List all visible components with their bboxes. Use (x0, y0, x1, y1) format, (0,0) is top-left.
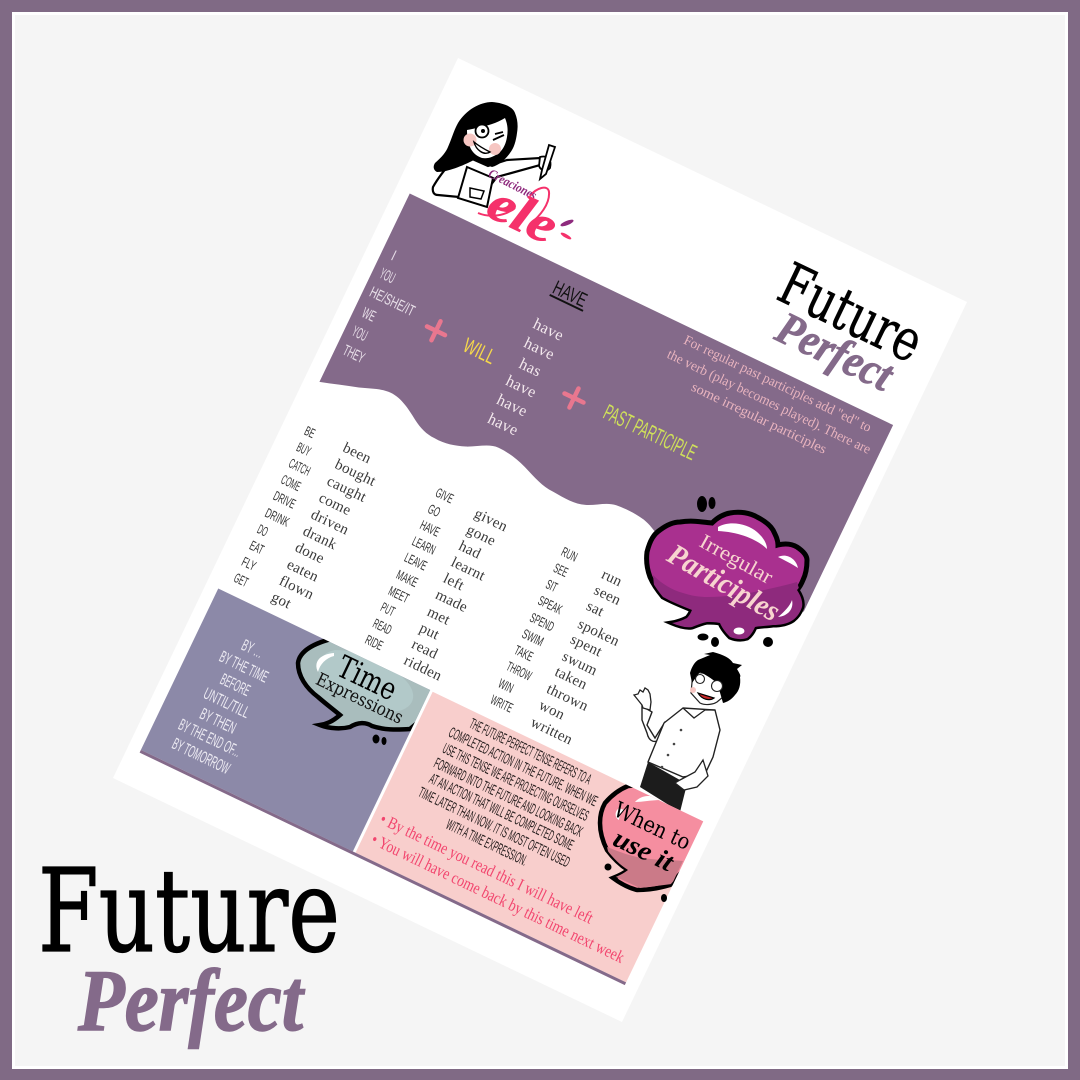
girl hand and pen (539, 145, 555, 179)
man raised arm (642, 706, 680, 741)
verb table: column two participles (401, 506, 515, 685)
man eyes and mouth (690, 674, 722, 700)
rotated text content: COMPLETED ACTION IN THE FUTURE. WHEN WE (446, 724, 600, 810)
bubble sheen (318, 650, 413, 712)
verb table: column two participles: met (425, 604, 453, 629)
text block: pronouns: YOU (349, 323, 370, 345)
text block: pronouns (339, 246, 436, 378)
verb table: column one base: BE (302, 423, 318, 441)
man face (691, 672, 723, 705)
verb table: column three participles: taken (552, 664, 590, 693)
panel: grammar formula purple wave (319, 193, 893, 615)
verb table: column two participles: left (440, 571, 467, 595)
text block: time expressions list: BY THE TIME (216, 648, 271, 687)
verb table: column three base: WRITE (488, 692, 515, 716)
verb table: column one base: DRIVE (271, 488, 298, 512)
title: Future Perfect corner (38, 845, 340, 1050)
girl hair (434, 102, 518, 172)
bubble highlights (616, 796, 660, 820)
label: past participle: PAST PARTICIPLE (600, 399, 701, 465)
text block: have conjugations: have (494, 391, 530, 421)
man hand (634, 688, 651, 710)
verb table: column one participles: bought (332, 457, 379, 490)
bubble shade (607, 847, 683, 888)
icon: time expressions speech bubble (296, 638, 430, 732)
text block: have conjugations: have (485, 410, 521, 439)
icon: when to use it speech bubble (598, 784, 704, 892)
girl eyes and smile (474, 124, 504, 153)
man shirt (648, 708, 720, 777)
verb table: column two base (363, 485, 461, 656)
cloud drops (697, 496, 773, 647)
verb table: column one participles: drank (300, 523, 339, 553)
heading: irregular participles (661, 529, 786, 628)
word Participles: Participles (661, 537, 786, 628)
verb table: column two base: MEET (386, 583, 412, 606)
text block: have conjugations (485, 316, 566, 439)
word Perfect: Perfect (768, 301, 902, 401)
verb table: column three participles (528, 567, 646, 748)
cloud shade (653, 575, 802, 640)
rotated text content: USE THIS TENSE WE ARE PROJECTING OURSELVES (440, 740, 591, 825)
verb table: column one base: CATCH (286, 456, 313, 479)
icon: irregular participles cloud bubble (647, 496, 815, 650)
word Perfect: Perfect (77, 953, 305, 1050)
girl notebook (458, 167, 493, 207)
bubble body (296, 638, 430, 732)
panel: time expressions (141, 588, 430, 851)
text block: regular participle note: some irregular participles (689, 380, 829, 458)
bubble highlight (316, 653, 334, 672)
word Irregular: Irregular (696, 529, 777, 589)
text block: have conjugations: has (516, 356, 544, 381)
verb table: column two base: MAKE (394, 567, 420, 590)
verb table: column three participles: spoken (575, 616, 622, 650)
text block: when to use explanation: AT AN ACTION THAT WILL BE COMPLETED SOME (426, 770, 576, 854)
verb table: column one base: DO (255, 522, 270, 539)
heading: when to use it: use it (609, 823, 680, 878)
verb table: column two participles: given (472, 506, 510, 535)
verb table: column one participles: driven (308, 507, 351, 539)
girl face (467, 118, 508, 158)
verb table: column two participles: learnt (448, 555, 488, 585)
verb table: column two participles: made (433, 587, 470, 616)
verb table: column two base: GIVE (433, 485, 456, 506)
logo swoosh (478, 188, 549, 224)
verb table: column three base: WIN (496, 676, 516, 696)
text block: when to use explanation (408, 708, 609, 886)
text block: pronouns: HE/SHE/IT (367, 284, 418, 320)
verb table: column two base: GO (425, 501, 443, 520)
heading: when to use it: When to (609, 798, 694, 856)
girl hand on notebook (470, 188, 484, 199)
text block: when to use explanation: WITH A TIME EXPRESSION. (443, 816, 530, 870)
panel: when to use it (356, 692, 703, 982)
girl blush (464, 134, 501, 155)
cloud body (647, 512, 807, 639)
verb table: column three base: SEE (551, 560, 570, 580)
word Future: Future (38, 845, 340, 979)
text block: time expressions list: BY THE END OF... (175, 716, 244, 761)
verb table: column two base: LEARN (410, 534, 438, 558)
text block: regular participle note: For regular past participles add "ed" to (681, 333, 873, 436)
bubble body (598, 784, 704, 892)
text block: time expressions list: UNTIL/TILL (200, 685, 252, 722)
verb table: column three base: SPEAK (536, 593, 565, 617)
rotated text content: THE FUTURE PERFECT TENSE REFERS TO A (467, 715, 594, 788)
man buttons (661, 729, 682, 768)
text block: example sentences: • By the time you read this I will have left (377, 809, 596, 928)
man hair (690, 652, 742, 703)
icon: when bubble drops (604, 864, 667, 902)
text block: pronouns: YOU (377, 265, 398, 287)
verb table: column one participles: got (269, 589, 294, 613)
verb table: column one participles: caught (324, 473, 369, 506)
bottom purple strip (140, 750, 626, 985)
verb table: column two participles: ridden (401, 653, 444, 685)
verb table: column one base: EAT (247, 538, 266, 557)
verb table: column one base: COME (279, 472, 303, 494)
text block: pronouns: THEY (340, 342, 367, 367)
man cuff and hand at hip (675, 760, 708, 790)
verb table: column two base: RIDE (363, 632, 386, 653)
verb table: column three participles: written (528, 715, 575, 748)
cloud highlights (718, 523, 798, 634)
icon: time bubble drops (372, 734, 386, 745)
icon: plus sign one (422, 317, 450, 345)
logo word Creaciones: Creaciones (486, 166, 539, 203)
heading: time expressions: Expressions (313, 669, 406, 729)
text block: regular participle note: the verb (play becomes played). There are (664, 347, 873, 458)
text block: time expressions list: BY … (239, 636, 266, 662)
verb table: column two participles: gone (464, 522, 498, 550)
verb table: column two participles: read (409, 637, 440, 663)
man trousers (640, 762, 687, 812)
text block: time expressions list (167, 627, 286, 779)
verb table: column three participles: seen (591, 583, 623, 609)
text block: when to use explanation: TIME LATER THAN NOW. IT IS MOST OFTEN USED (415, 784, 573, 871)
text block: have conjugations: have (503, 372, 539, 402)
logo: Creaciones ele (478, 166, 574, 256)
verb table: column one base (232, 423, 331, 595)
verb table: column two participles: put (417, 620, 442, 644)
text block: when to use explanation: FORWARD INTO THE FUTURE AND LOOKING BACK (431, 755, 585, 841)
girl left arm and body (433, 158, 540, 199)
word Future: Future (768, 250, 934, 376)
verb table: column two participles: had (456, 538, 483, 563)
heading: time expressions (313, 643, 419, 729)
verb table: column one participles: flown (276, 573, 316, 603)
logo accents (560, 218, 574, 241)
heading: have: HAVE (549, 277, 590, 312)
verb table: column three base: THROW (504, 659, 534, 684)
verb table: column one participles: eaten (284, 557, 321, 586)
icon: logo girl illustration (433, 102, 555, 207)
verb table: column three participles: thrown (544, 681, 591, 715)
man collar (683, 708, 715, 718)
text block: pronouns: I (389, 248, 399, 264)
verb table: column three participles: won (536, 698, 567, 724)
panel: man illustration (634, 652, 742, 812)
verb table: column three participles: spent (568, 632, 605, 661)
verb table: column three participles: swum (559, 649, 600, 679)
heading: when to use it (598, 798, 694, 880)
icon: plus sign two (560, 384, 588, 412)
heading: time expressions: Time (331, 649, 403, 708)
verb table: column three base: RUN (559, 544, 580, 565)
text block: time expressions list: BEFORE (217, 670, 253, 700)
text block: time expressions list: BY TOMORROW (169, 735, 233, 778)
verb table: column two base: READ (371, 616, 394, 638)
verb table: column one base: FLY (239, 554, 258, 574)
label: will: WILL (459, 334, 499, 369)
verb table: column one base: GET (232, 570, 251, 590)
text block: pronouns: WE (359, 305, 378, 326)
verb table: column one participles: been (340, 440, 374, 467)
text block: time expressions list: BY THEN (197, 705, 239, 738)
verb table: column two base: PUT (378, 600, 397, 619)
text block: have conjugations: have (521, 335, 557, 364)
verb table: column three base: SIT (543, 577, 560, 595)
verb table: column three participles: sat (584, 598, 607, 621)
logo word ele: ele (479, 174, 566, 256)
verb table: column three base: SPEND (527, 610, 557, 634)
verb table: column three base: TAKE (512, 642, 536, 664)
verb table: column three base: SWIM (520, 626, 546, 649)
verb table: column three participles: run (599, 567, 625, 590)
text block: have conjugations: have (530, 316, 566, 345)
panel: rotated paper sheet (113, 58, 967, 1022)
heading: have (549, 277, 592, 313)
title: Future Perfect on sheet (754, 250, 934, 406)
verb table: column three base (488, 544, 589, 717)
verb table: column one participles: done (292, 540, 327, 567)
verb table: column one participles (269, 440, 387, 623)
verb table: column two base: HAVE (418, 517, 442, 540)
rotated text content (154, 91, 941, 971)
verb table: column one base: BUY (294, 439, 313, 459)
text block: example sentences: • You will have come back by this time next week (368, 830, 628, 967)
verb table: column two base: LEAVE (402, 550, 429, 573)
verb table: column one base: DRINK (263, 505, 292, 530)
verb table: column one participles: come (316, 490, 353, 519)
